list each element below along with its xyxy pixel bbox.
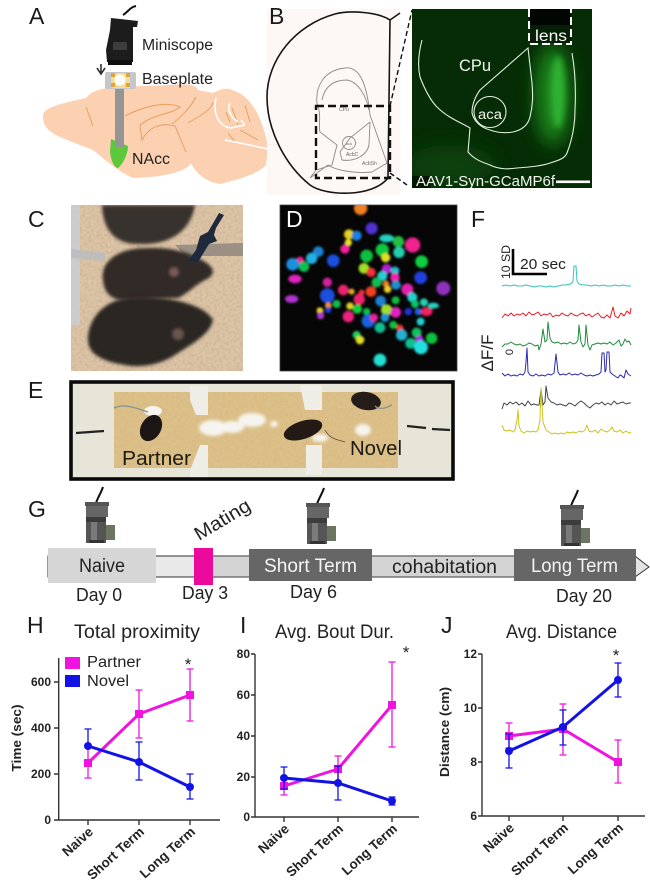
stage: Long Term: Long Term bbox=[531, 556, 618, 577]
label C: C bbox=[28, 206, 45, 232]
y tick labels bbox=[31, 675, 51, 827]
legend: Novel bbox=[87, 673, 129, 690]
y tick labels: 10 bbox=[464, 701, 477, 715]
y tick labels: 60 bbox=[237, 688, 250, 702]
label Partner: Partner bbox=[122, 448, 191, 470]
x tick labels: Naive bbox=[255, 821, 292, 856]
label A: A bbox=[29, 3, 45, 29]
series: Partner bbox=[280, 662, 396, 795]
x tick labels: Short Term bbox=[283, 821, 346, 880]
x tick labels bbox=[59, 824, 198, 883]
scale bar bbox=[513, 249, 547, 274]
atlas region labels bbox=[339, 107, 377, 167]
significance asterisk: * bbox=[403, 643, 410, 662]
cerebellum white fissures bbox=[215, 98, 268, 149]
coloured neuron footprints bbox=[285, 202, 450, 366]
y tick labels bbox=[237, 647, 250, 824]
y tick labels bbox=[464, 647, 477, 823]
label Miniscope: Miniscope bbox=[142, 37, 213, 54]
atlas hemisphere outline bbox=[267, 12, 400, 193]
panel E: three-chamber test photo bbox=[28, 377, 453, 479]
label AAV1-Syn-GCaMP6f: AAV1-Syn-GCaMP6f bbox=[416, 174, 556, 190]
title: Avg. Distance bbox=[506, 622, 617, 643]
y axis title: Distance (cm) bbox=[437, 687, 452, 777]
icon: baseplate bbox=[105, 72, 136, 89]
series: Partner bbox=[505, 704, 622, 783]
histology outlines bbox=[419, 40, 575, 169]
label Day 6: Day 6 bbox=[290, 582, 337, 602]
atlas striatum regions bbox=[310, 68, 387, 178]
x tick labels: Long Term bbox=[137, 824, 198, 881]
legend: Partner bbox=[87, 654, 141, 671]
atlas region labels: AcbSh bbox=[362, 161, 377, 167]
series: Novel bbox=[505, 663, 622, 768]
icon: GRIN lens rod bbox=[115, 89, 124, 147]
label Day 0: Day 0 bbox=[76, 585, 122, 605]
atlas region labels: CPu bbox=[339, 107, 349, 113]
label aca: aca bbox=[478, 107, 503, 122]
label delta F over F: ΔF/F bbox=[478, 334, 497, 372]
implanted miniscope in photo bbox=[188, 213, 224, 262]
stage: Long Term bbox=[514, 549, 636, 581]
icon: miniscope Day 20 bbox=[560, 490, 590, 546]
label Mating: Mating bbox=[191, 495, 255, 545]
series: Novel bbox=[280, 766, 396, 805]
y tick labels: 20 bbox=[237, 770, 250, 784]
atlas region labels: aca bbox=[346, 142, 352, 146]
stage: Short Term bbox=[249, 549, 372, 581]
series: Novel bbox=[84, 729, 194, 799]
label 20 sec: 20 sec bbox=[520, 256, 567, 273]
icon: miniscope Day 6 bbox=[306, 488, 336, 544]
significance asterisk: * bbox=[613, 646, 620, 665]
novel vole bbox=[350, 390, 382, 412]
significance asterisk: * bbox=[185, 655, 192, 674]
label Day 20: Day 20 bbox=[556, 586, 612, 606]
axes bbox=[54, 658, 220, 825]
axes bbox=[478, 654, 645, 821]
stage: Naive bbox=[48, 548, 156, 583]
axes bbox=[251, 654, 419, 822]
three-chamber arena photo bbox=[71, 382, 453, 479]
label J: J bbox=[441, 612, 452, 638]
trace grey bbox=[502, 386, 631, 409]
label B: B bbox=[269, 3, 284, 29]
label Baseplate: Baseplate bbox=[142, 71, 213, 88]
lens dashed marker bbox=[529, 9, 571, 44]
y tick labels: 80 bbox=[237, 647, 250, 661]
tethers and divider marks bbox=[76, 405, 450, 442]
label zero: 0 bbox=[504, 349, 516, 355]
timeline bar bbox=[48, 556, 649, 577]
zoom box dashed bbox=[316, 106, 390, 178]
trace red bbox=[502, 307, 631, 318]
y axis title: Time (sec) bbox=[9, 704, 24, 772]
y tick labels: 400 bbox=[31, 721, 51, 735]
y tick labels: 12 bbox=[464, 647, 477, 661]
panel I: average bout duration chart bbox=[237, 612, 419, 880]
label cohabitation: cohabitation bbox=[392, 557, 497, 578]
label 10 SD: 10 SD bbox=[501, 245, 513, 279]
frame bbox=[71, 382, 453, 479]
partner vole bbox=[135, 411, 167, 445]
x tick labels bbox=[255, 821, 400, 880]
label lens: lens bbox=[535, 28, 567, 45]
cell map background bbox=[280, 205, 457, 371]
x tick labels: Long Term bbox=[339, 821, 400, 878]
atlas background bbox=[267, 9, 400, 195]
brain sagittal silhouette bbox=[43, 84, 268, 184]
y tick labels: 200 bbox=[31, 767, 51, 781]
panel A: miniscope implant over brain bbox=[29, 3, 268, 184]
x tick labels: Short Term bbox=[84, 824, 147, 883]
label F: F bbox=[471, 206, 485, 232]
label CPu: CPu bbox=[459, 56, 491, 75]
icon: miniscope Day 0 bbox=[85, 487, 115, 543]
icon: down arrow bbox=[97, 64, 105, 74]
label NAcc: NAcc bbox=[132, 151, 170, 168]
y tick labels: 40 bbox=[237, 729, 250, 743]
panel H: total proximity chart bbox=[9, 612, 220, 883]
x tick labels bbox=[480, 820, 626, 879]
label E: E bbox=[28, 377, 43, 403]
label Novel: Novel bbox=[350, 438, 402, 460]
label Day 3: Day 3 bbox=[182, 583, 228, 603]
panel F: calcium traces bbox=[471, 206, 631, 434]
x tick labels: Short Term bbox=[508, 820, 571, 879]
trace yellow bbox=[502, 388, 631, 434]
label D: D bbox=[286, 206, 303, 232]
icon: miniscope bbox=[106, 6, 138, 65]
fluorescence micrograph bbox=[405, 9, 592, 190]
title: Total proximity bbox=[74, 622, 201, 643]
y tick labels: 0 bbox=[44, 813, 51, 827]
zoom projection lines bbox=[390, 10, 412, 185]
atlas region labels: AcbC bbox=[346, 152, 359, 158]
y tick labels: 8 bbox=[470, 755, 477, 769]
label I: I bbox=[240, 612, 246, 638]
panel J: average distance chart bbox=[437, 612, 645, 879]
panel C: photo of voles bbox=[28, 205, 243, 371]
x tick labels: Long Term bbox=[565, 820, 626, 877]
brain inner tract lines bbox=[86, 97, 258, 152]
label H: H bbox=[27, 612, 44, 638]
trace blue bbox=[502, 348, 631, 378]
icon: NAcc green region bbox=[110, 139, 128, 168]
stage: Short Term: Short Term bbox=[264, 556, 357, 577]
trace green bbox=[502, 322, 631, 350]
scale bar bbox=[556, 180, 590, 183]
x tick labels: Naive bbox=[480, 820, 517, 855]
y tick labels: 600 bbox=[31, 675, 51, 689]
trace cyan bbox=[502, 266, 631, 287]
y tick labels: 6 bbox=[470, 809, 477, 823]
x tick labels: Naive bbox=[59, 824, 96, 859]
stage: Naive: Naive bbox=[79, 556, 125, 577]
photo of two voles on bedding bbox=[71, 205, 243, 371]
panel G: experimental timeline bbox=[28, 487, 649, 606]
stage: Mating marker bbox=[194, 548, 213, 585]
tested vole with tether bbox=[281, 415, 325, 445]
panel B: coronal atlas and histology bbox=[267, 3, 592, 195]
legend bbox=[65, 654, 141, 690]
series: Partner bbox=[84, 669, 194, 778]
y tick labels: 0 bbox=[243, 810, 250, 824]
label G: G bbox=[28, 496, 46, 522]
title: Avg. Bout Dur. bbox=[275, 622, 394, 643]
panel D: cell map bbox=[280, 202, 457, 371]
